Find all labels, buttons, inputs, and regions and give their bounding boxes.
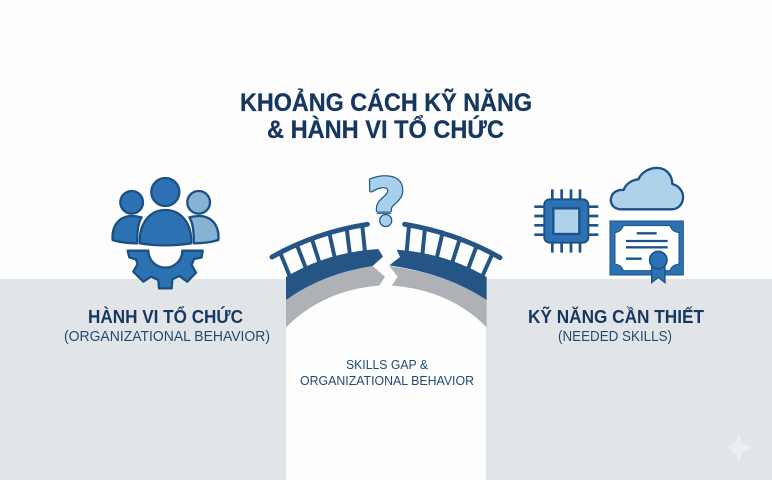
icon: left person [113,191,143,243]
bridge left railing [272,224,367,278]
label: needed skills: KỸ NĂNG CẦN THIẾT [528,306,704,327]
icon: question mark: ? [367,165,405,243]
icon: sparkle [725,434,753,462]
icon: gear [128,251,203,288]
panel: left ground [0,279,286,480]
title: & HÀNH VI TỔ CHỨC [267,114,504,144]
label: skills gap [300,357,474,388]
bridge right railing [405,224,500,278]
title: KHOẢNG CÁCH KỸ NĂNG [240,87,532,117]
bridge right deck [389,250,487,300]
title [240,87,532,144]
icon: chip, cloud and certificate [534,168,683,283]
icon: people and gear [113,178,218,288]
label: organizational behavior: HÀNH VI TỔ CHỨC [88,306,243,327]
label: needed skills [528,306,704,345]
icon: microchip [534,189,598,253]
icon: certificate [610,221,683,283]
label: needed skills: (NEEDED SKILLS) [558,328,672,345]
bridge left deck [286,249,383,300]
bridge left stone shadow [286,266,385,327]
icon: question mark: ? [367,165,405,243]
label: organizational behavior [64,306,270,345]
broken bridge [272,224,500,327]
icon: center person [140,178,191,245]
icon: question mark [369,175,404,228]
label: skills gap: SKILLS GAP & [346,357,428,372]
label: skills gap: ORGANIZATIONAL BEHAVIOR [300,373,474,388]
bridge right stone shadow [389,266,487,327]
icon: cloud [611,168,683,209]
panel: right ground [486,279,772,480]
label: organizational behavior: (ORGANIZATIONAL BEHAVIOR) [64,328,270,345]
icon: right person [187,191,218,243]
